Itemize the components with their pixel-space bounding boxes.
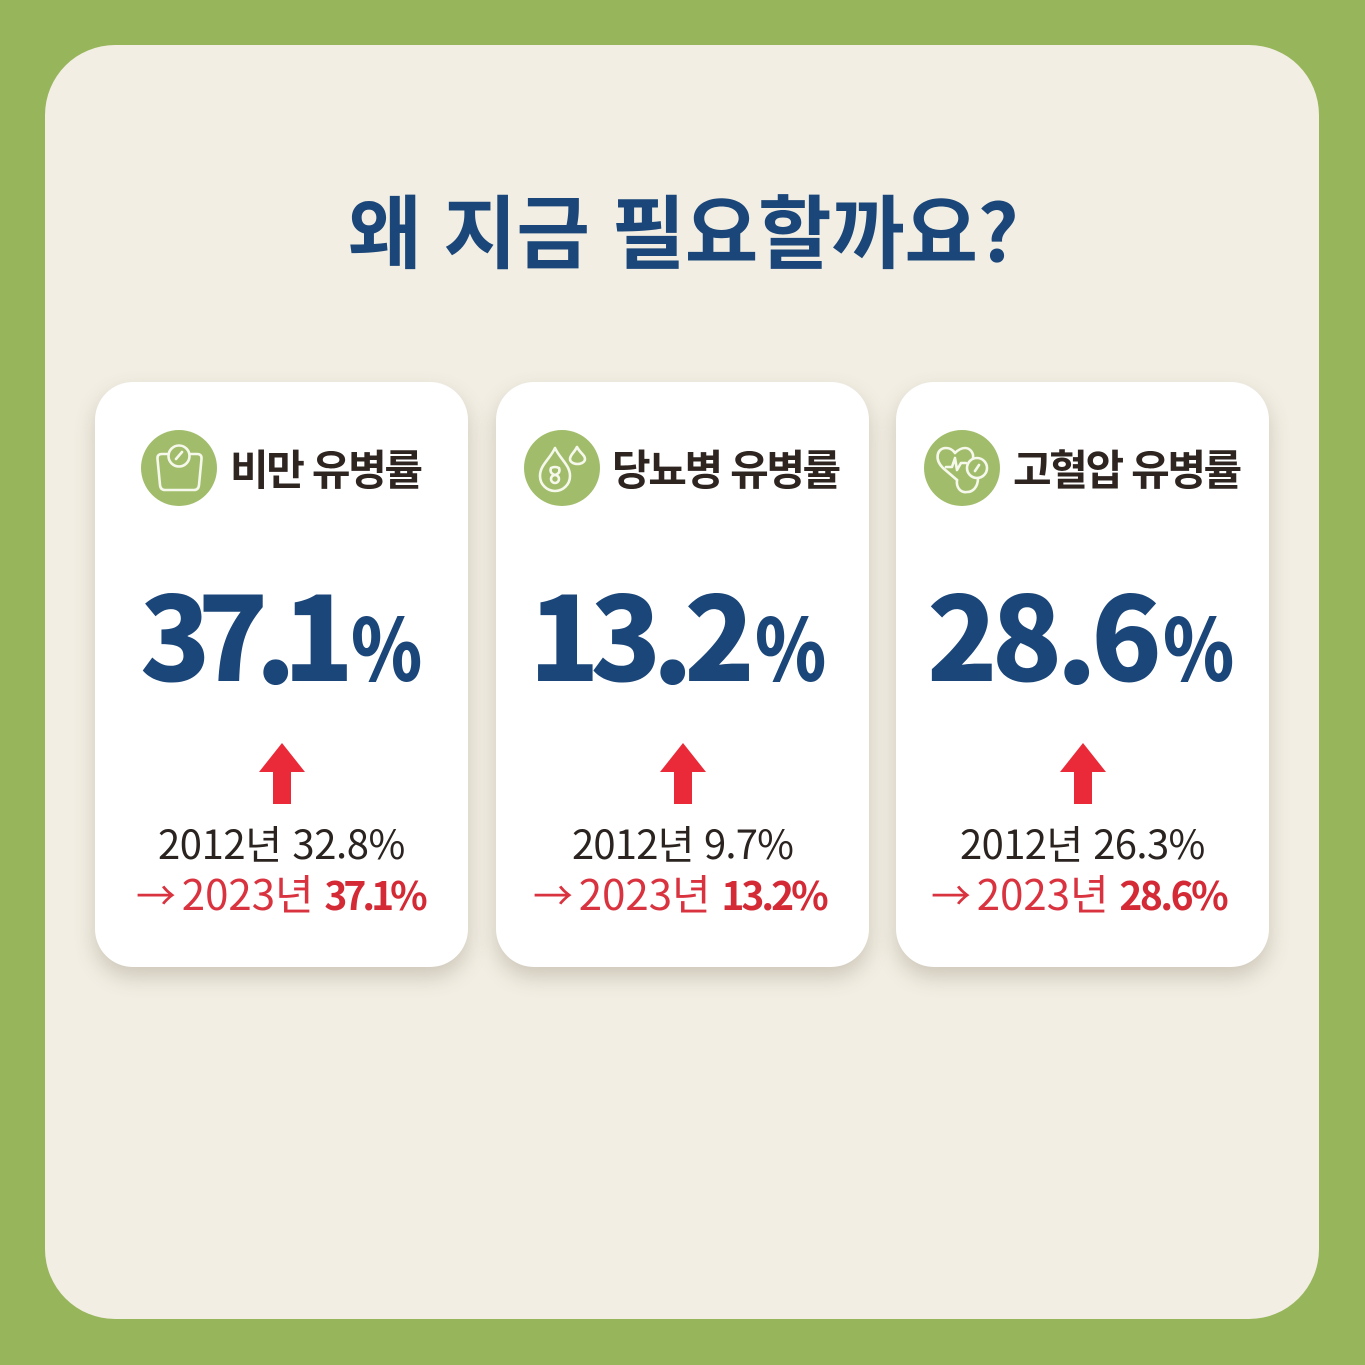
title: 왜 지금 필요할까요? [348,170,1018,286]
text: 2023 value: → 2023년 13.2% [533,862,826,923]
icon: heart and gauge [924,430,1000,506]
panel: obesity card [95,382,468,967]
stat: diabetes: % [755,581,826,706]
panel: hypertension card [896,382,1269,967]
heading: hypertension: 고혈압 유병률 [1013,437,1240,498]
text: 2012 value: 2012년 9.7% [572,813,793,871]
stat: diabetes: 13.2 [529,547,746,715]
icon: scale [141,430,217,506]
stat: hypertension: 28.6 [927,547,1156,715]
arrow: increase [660,743,706,804]
icon: water drops [524,430,600,506]
stat: obesity: 37.1 [140,547,341,715]
heading: obesity: 비만 유병률 [230,437,421,498]
stat: obesity: % [351,581,422,706]
text: 2023 value: → 2023년 28.6% [931,862,1226,923]
arrow: increase [259,743,305,804]
text: 2023 value: → 2023년 37.1% [136,862,424,923]
stat: hypertension: % [1163,581,1234,706]
panel: diabetes card [496,382,869,967]
text: 2012 value: 2012년 26.3% [960,813,1205,871]
arrow: increase [1060,743,1106,804]
heading: diabetes: 당뇨병 유병률 [612,437,839,498]
text: 2012 value: 2012년 32.8% [158,813,405,871]
